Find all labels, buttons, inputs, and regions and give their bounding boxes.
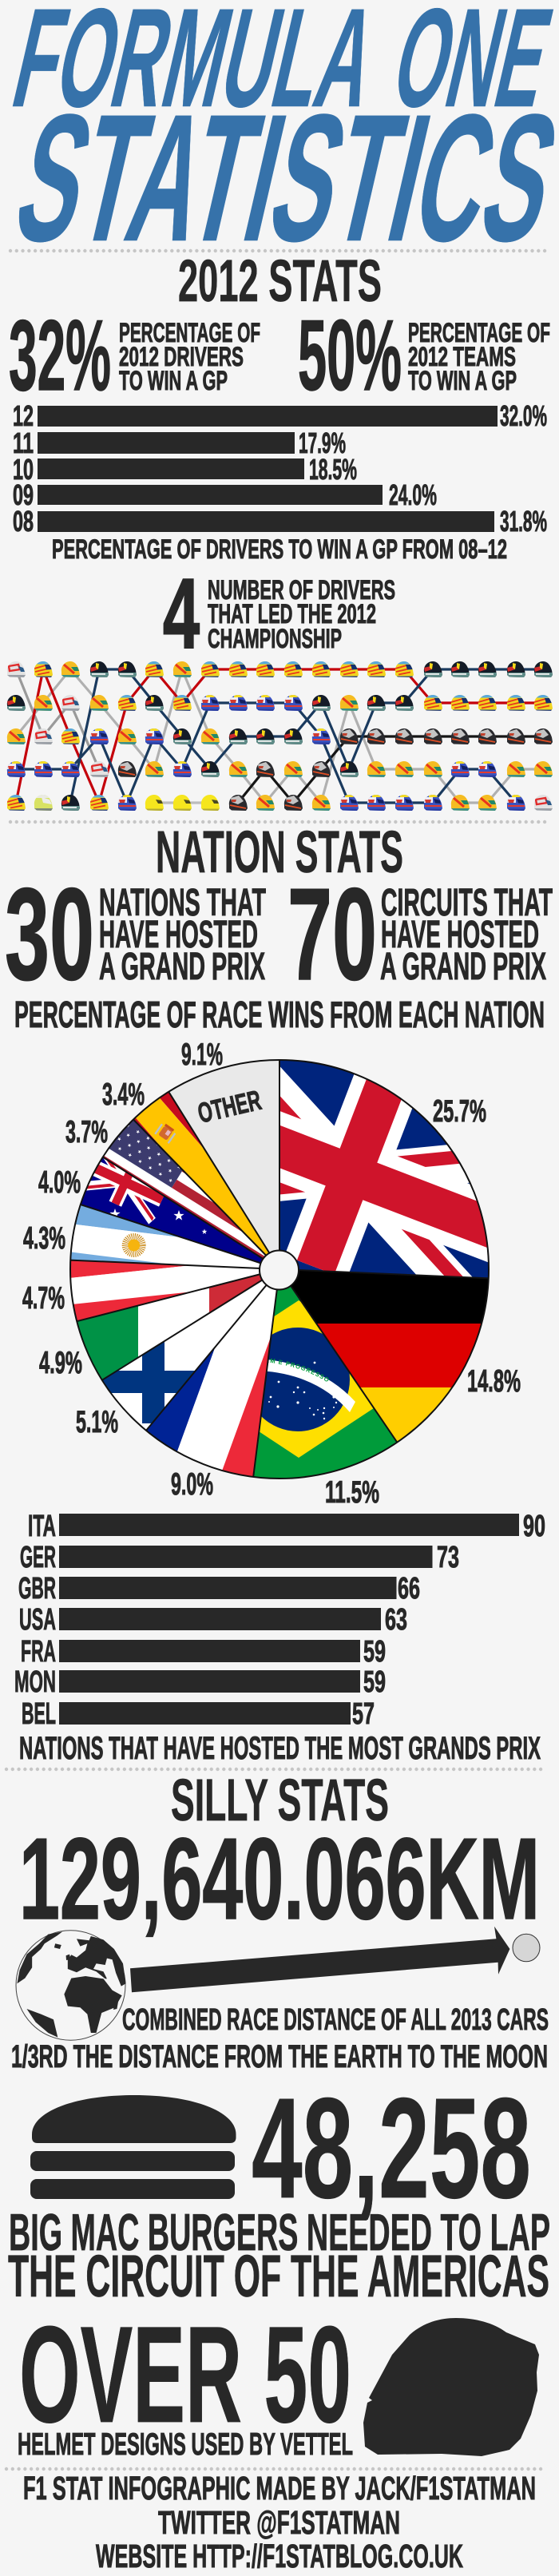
bar chart: nations that have hosted the most grands prix: MON: [14, 1665, 56, 1699]
stat: 30 nations: 30: [5, 861, 94, 1007]
pie value labels: 25.7%: [433, 1094, 486, 1129]
bar chart: drivers to win a GP by year: [13, 399, 547, 538]
bar chart: nations that have hosted the most grands prix: 57: [352, 1697, 375, 1731]
pie value labels: 4.0%: [38, 1165, 81, 1200]
stat: 70 circuits: 70: [287, 861, 377, 1007]
stat: 30 nations: [5, 861, 266, 1007]
bar chart: drivers to win a GP by year: 24.0%: [389, 478, 437, 511]
pie hub: [260, 1251, 299, 1289]
bar chart: drivers to win a GP by year: 09: [13, 478, 34, 511]
stat: 30 nations: A GRAND PRIX: [99, 946, 265, 988]
bar chart: drivers to win a GP by year: 08: [13, 505, 34, 538]
bar chart: nations that have hosted the most grands prix: GER: [20, 1541, 56, 1574]
bar chart: nations that have hosted the most grands prix: USA: [19, 1603, 56, 1637]
stat: 4 championship leaders: CHAMPIONSHIP: [208, 624, 342, 654]
pie value labels: 4.7%: [22, 1281, 65, 1316]
pie value labels: 4.9%: [39, 1346, 82, 1380]
bar chart: nations that have hosted the most grands prix: 59: [363, 1665, 386, 1699]
footer credits: TWITTER @F1STATMAN: [158, 2504, 400, 2541]
slice: Argentina: [71, 1205, 260, 1267]
slice: France: [147, 1286, 276, 1476]
chart: championship lead helmets bump chart: [6, 661, 553, 811]
stat: 30 nations: HAVE HOSTED: [99, 914, 258, 956]
bar chart: nations that have hosted the most grands prix: ITA: [28, 1510, 56, 1543]
pie value labels: 3.7%: [65, 1115, 108, 1149]
bar chart: nations that have hosted the most grands prix: [14, 1510, 545, 1731]
slice: Australia: [81, 1158, 262, 1262]
bar chart: nations that have hosted the most grands prix: GBR: [18, 1572, 56, 1606]
slice: Germany: [292, 1271, 488, 1441]
slice: United States: [104, 1121, 265, 1257]
icon: helmet silhouette: [363, 2318, 539, 2456]
slice: Great Britain: [280, 1061, 488, 1278]
slice: Italy: [78, 1275, 261, 1379]
bar chart: nations that have hosted the most grands prix: BEL: [22, 1697, 56, 1731]
pie value labels: [22, 1038, 521, 1510]
stat: 4 championship leaders: 4: [163, 559, 200, 669]
slice: Brazil: [254, 1287, 396, 1478]
bar chart: nations that have hosted the most grands prix: 66: [398, 1572, 420, 1606]
slice: Austria: [71, 1260, 259, 1320]
slice: Spain: [134, 1093, 268, 1254]
pie dividers and outline: [70, 1060, 489, 1479]
pie value labels: 9.1%: [181, 1038, 223, 1072]
icon: moon: [513, 1934, 540, 1962]
stat: 32% of drivers: 2012 DRIVERS: [119, 342, 244, 372]
footer credits: [23, 2470, 536, 2574]
stat: 30 nations: NATIONS THAT: [99, 882, 266, 924]
pie value labels: 14.8%: [467, 1364, 521, 1399]
text: big mac caption: [8, 2203, 550, 2309]
pie value labels: 5.1%: [76, 1405, 118, 1439]
pie value labels: 3.4%: [102, 1078, 145, 1112]
pie value labels: 11.5%: [325, 1475, 379, 1510]
bar chart: nations that have hosted the most grands prix: FRA: [21, 1635, 56, 1669]
bar chart: nations that have hosted the most grands prix: 73: [437, 1541, 459, 1574]
icon: earth: [16, 1931, 126, 2040]
heading: silly stats: SILLY STATS: [171, 1767, 389, 1833]
slice: Brazil: ORDEM E PROGRESSO: [268, 1358, 329, 1382]
arrow: earth to moon: [130, 1927, 509, 1992]
slice label: other: OTHER: [195, 1085, 264, 1129]
slice: other: [168, 1060, 280, 1269]
bar chart: drivers to win a GP by year: 10: [13, 453, 34, 486]
bar chart: nations that have hosted the most grands prix: 59: [363, 1635, 386, 1669]
pie value labels: 4.3%: [23, 1221, 65, 1256]
bar chart: drivers to win a GP by year: 18.5%: [309, 453, 357, 486]
text: helmet caption: HELMET DESIGNS USED BY VETTEL: [18, 2427, 353, 2462]
stat: 32% of drivers: PERCENTAGE OF: [119, 318, 260, 348]
stat: 32% of drivers: 32%: [9, 300, 111, 411]
stat: 4 championship leaders: NUMBER OF DRIVERS: [208, 575, 395, 605]
pie value labels: 9.0%: [171, 1467, 213, 1502]
heading: 2012 stats: 2012 STATS: [178, 248, 382, 314]
bar chart: drivers to win a GP by year: 12: [13, 399, 34, 432]
pie chart: race wins by nation: [69, 1059, 490, 1479]
stat: 4 championship leaders: THAT LED THE 2012: [208, 599, 376, 629]
bar chart: nations that have hosted the most grands prix: 90: [523, 1510, 545, 1543]
icon: burger: [30, 2095, 236, 2199]
stat: 50% of teams: 50%: [298, 300, 402, 411]
slice: Finland: [103, 1281, 265, 1429]
bar chart: drivers to win a GP by year: 17.9%: [299, 427, 346, 459]
stat: 32% of drivers: TO WIN A GP: [119, 366, 228, 396]
bar chart: nations that have hosted the most grands prix: 63: [385, 1603, 407, 1637]
bar chart: drivers to win a GP by year: 11: [13, 427, 34, 459]
stat: 4 championship leaders: [163, 559, 395, 669]
stat: 70 circuits: [287, 861, 553, 1007]
